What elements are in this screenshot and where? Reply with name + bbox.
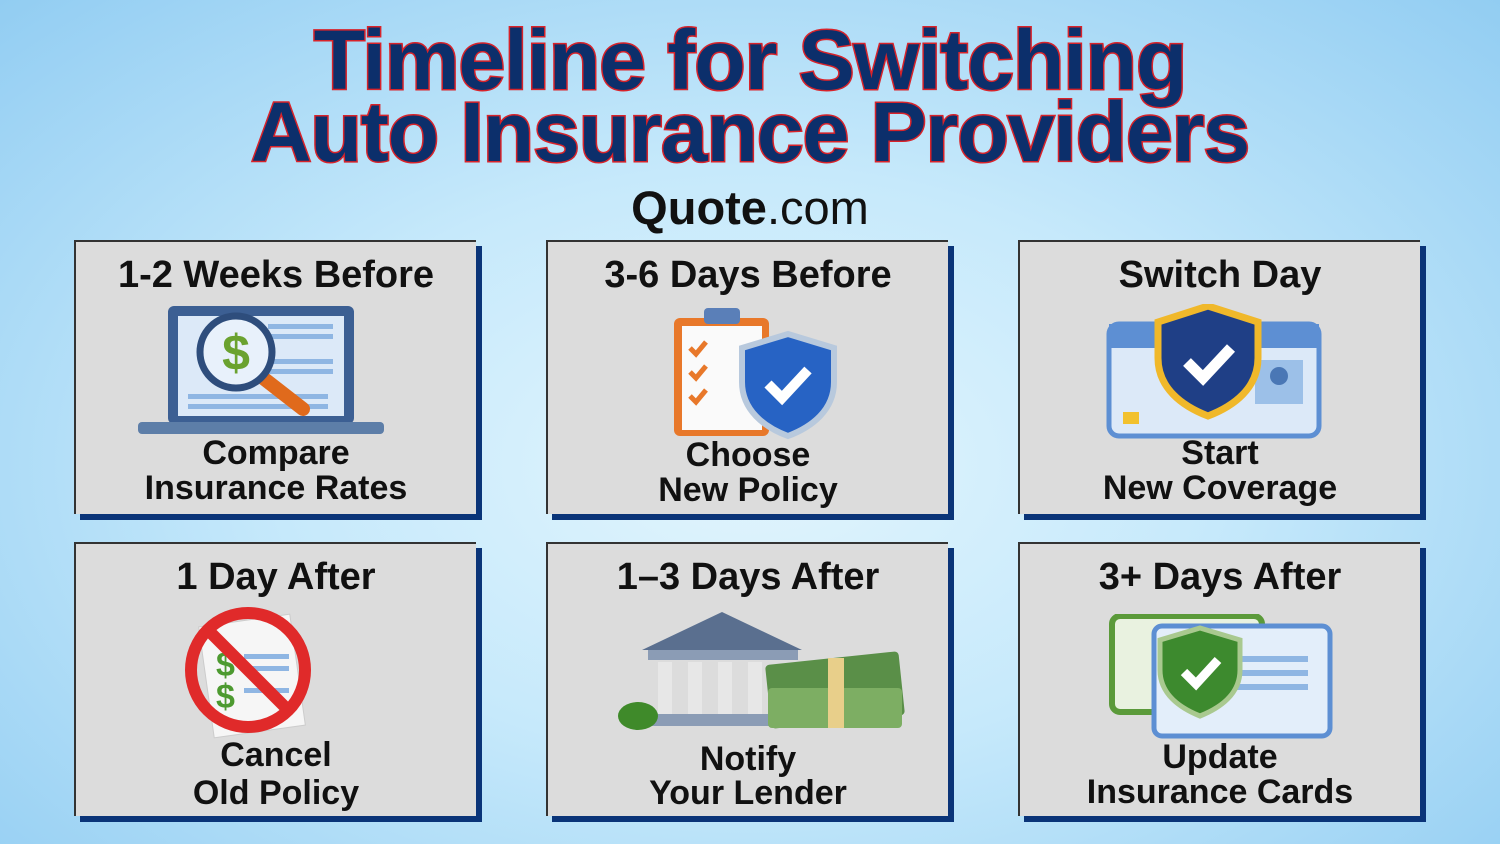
panel: 1 day after: Cancel [220,736,332,774]
panel: 3-6 days before: New Policy [658,471,838,509]
panel: 1 day after: Old Policy [193,774,359,812]
panel: 1-2 weeks before: Compare [202,434,350,472]
panel: 3+ days after [1018,542,1420,816]
panel: 3-6 days before: 3-6 Days Before [604,254,892,296]
panel: switch day: Start [1181,434,1259,472]
panel: 1-3 days after: Your Lender [649,774,847,812]
icon: insurance cards [1109,614,1332,738]
panel: switch day: Switch Day [1119,254,1321,296]
icon: clipboard with shield [674,308,837,440]
icon: bank with money [618,612,905,730]
panel: 1-3 days after: 1–3 Days After [617,556,879,598]
panel: 1-3 days after: Notify [700,740,796,778]
icon: cancelled bill: $ [216,678,235,716]
icon: cancelled bill [185,607,311,738]
icon: cancelled bill: $ [216,646,235,684]
panel: switch day [1018,240,1420,514]
panel: 3+ days after: 3+ Days After [1099,556,1341,598]
icon: laptop with magnifier [138,306,384,434]
panel: 1 day after [74,542,476,816]
title: Timeline for Switching [314,13,1186,107]
panel: 3+ days after: Update [1162,738,1278,776]
panel: 1-2 weeks before [74,240,476,514]
panel: switch day: New Coverage [1103,469,1337,507]
panel: 3-6 days before: Choose [686,436,810,474]
panel: 1-2 weeks before: Insurance Rates [145,469,407,507]
panel: 1-2 weeks before: 1-2 Weeks Before [118,254,434,296]
panel: 3+ days after: Insurance Cards [1087,773,1353,811]
panel: 1-3 days after [546,542,948,816]
title [250,13,1249,179]
icon: laptop with magnifier: $ [222,325,250,381]
panel: 3-6 days before [546,240,948,514]
title: Auto Insurance Providers [251,85,1249,179]
icon: ID card with shield [1106,304,1322,438]
logo: Quote.com: Quote.com [631,181,869,234]
panel: 1 day after: 1 Day After [176,556,376,598]
